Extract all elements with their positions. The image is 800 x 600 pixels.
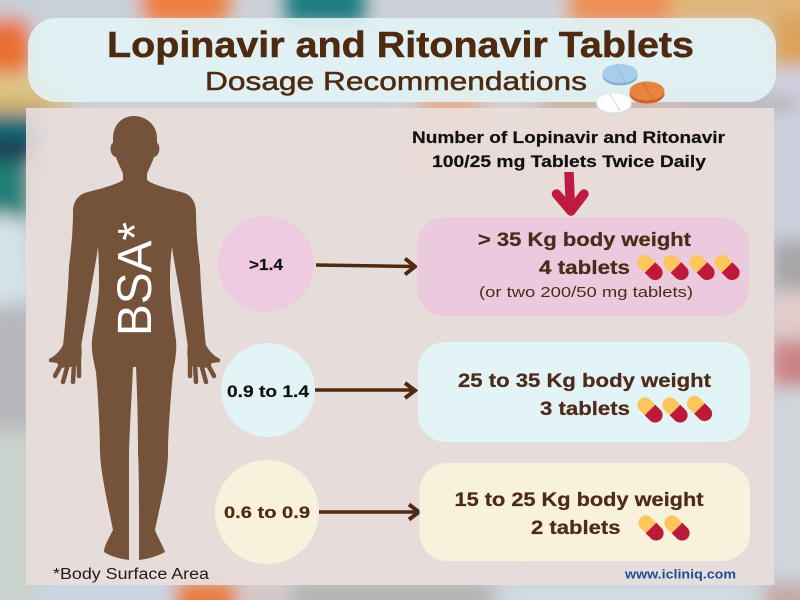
arrow: >1.4 to over 35 Kg [316,258,415,274]
BSA circle: >1.4: >1.4 [249,257,283,274]
title banner panel [28,18,776,102]
dose box: 15 to 25 Kg: 15 to 25 Kg body weight [454,489,704,511]
BSA circle: 0.9 to 1.4 [221,343,315,437]
dose box: 25 to 35 Kg: 3 tablets [540,398,630,420]
BSA circle: 0.9 to 1.4: 0.9 to 1.4 [227,382,310,401]
red down arrow [556,172,584,211]
column heading: number of tablets: 100/25 mg Tablets Twice Daily [432,153,707,171]
dose box: over 35 Kg: 4 tablets [539,257,630,279]
arrow: 0.9 to 1.4 to 25 to 35 Kg [315,383,415,398]
dose box: 15 to 25 Kg [420,463,750,561]
footnote: body surface area: *Body Surface Area [53,566,209,583]
dose box: 25 to 35 Kg [418,342,750,442]
arrow: 0.6 to 0.9 to 15 to 25 Kg [319,504,419,520]
dose box: over 35 Kg [417,217,749,316]
subtitle: Dosage Recommendations [205,66,587,96]
human body silhouette with BSA label: BSA* [109,222,162,336]
BSA circle: >1.4 [218,216,314,312]
dose box: over 35 Kg: > 35 Kg body weight [478,229,692,251]
human body silhouette with BSA label [49,116,220,560]
dose box: 25 to 35 Kg: 25 to 35 Kg body weight [458,370,712,392]
column heading: number of tablets: Number of Lopinavir and Ritonavir [412,129,726,147]
BSA circle: 0.6 to 0.9: 0.6 to 0.9 [224,503,310,522]
BSA circle: 0.6 to 0.9 [215,460,319,564]
dose box: over 35 Kg: (or two 200/50 mg tablets) [479,285,693,301]
source url: www.icliniq.com [624,566,736,582]
main title: Lopinavir and Ritonavir Tablets [107,24,694,65]
dose box: 15 to 25 Kg: 2 tablets [531,517,621,539]
icon: three tablets [596,64,664,114]
column heading: number of tablets [412,129,726,171]
main content panel [26,108,774,585]
